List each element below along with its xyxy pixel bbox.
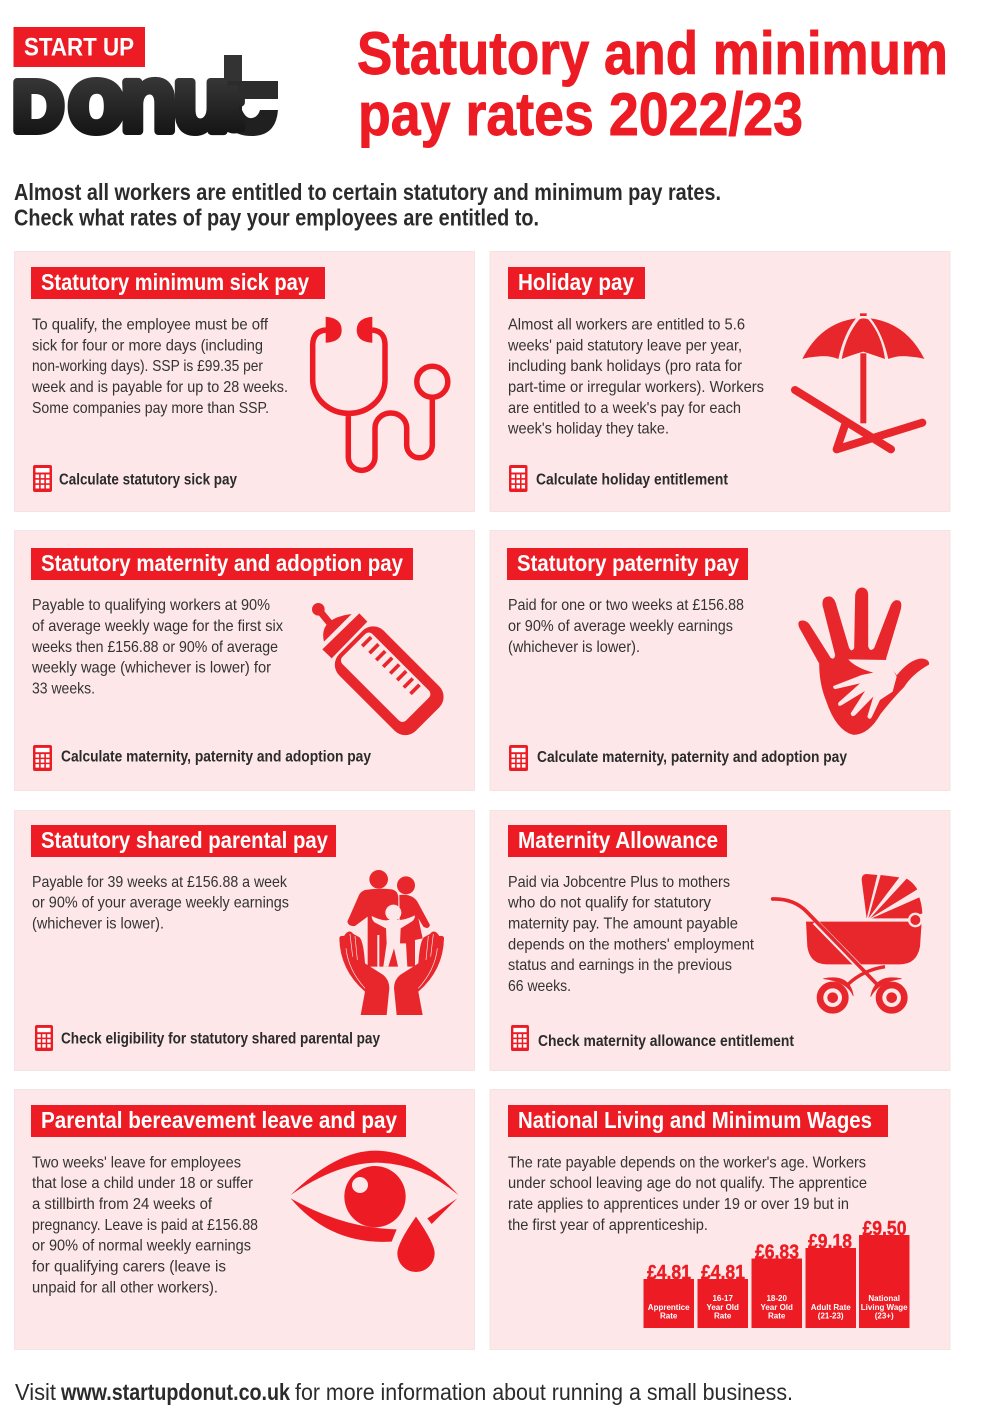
link: check maternity allowance entitlement: Check maternity allowance entitlement — [538, 1033, 794, 1050]
text block: shared parental pay: or 90% of your average weekly earnings — [32, 895, 289, 912]
icon: adult and child hands — [799, 588, 928, 734]
icon: baby bottle — [312, 603, 450, 741]
link: calculate holiday entitlement — [509, 465, 728, 492]
bar: apprentice rate: Apprentice — [648, 1303, 690, 1312]
heading: shared parental pay: Statutory shared parental pay — [41, 827, 328, 853]
logo: Start Up Donut: D — [12, 68, 64, 147]
bar: 16-17 year old rate: Year Old — [706, 1303, 739, 1312]
heading: national living and minimum wages: National Living and Minimum Wages — [518, 1107, 872, 1133]
text block: national wages: under school leaving age do not qualify. The apprentice — [508, 1175, 867, 1192]
bar: adult rate: Adult Rate — [811, 1303, 851, 1312]
bar: 16-17 year old rate — [698, 1262, 748, 1328]
text block: parental bereavement: unpaid for all other workers). — [32, 1279, 218, 1296]
bar: adult rate: (21-23) — [818, 1312, 844, 1320]
heading: maternity and adoption pay: Statutory maternity and adoption pay — [41, 550, 403, 576]
text block: maternity pay: weeks then £156.88 or 90% of average — [31, 639, 278, 656]
link: check eligibility for statutory shared parental pay: Check eligibility for statutory shared parental pay — [61, 1030, 380, 1048]
bar: national living wage: (23+) — [875, 1312, 894, 1320]
bar: 16-17 year old rate: Rate — [714, 1312, 732, 1320]
link: calculate maternity, paternity and adoption pay — [509, 745, 847, 771]
icon part: right hand — [394, 931, 444, 1015]
link: calculate maternity, paternity and adoption pay: Calculate maternity, paternity and adoption pay — [537, 749, 847, 766]
text block: holiday pay: Almost all workers are entitled to 5.6 — [508, 316, 745, 334]
panel: parental bereavement leave and pay — [14, 1090, 474, 1350]
text block: maternity allowance: status and earnings in the previous — [508, 957, 732, 974]
text block: shared parental pay: (whichever is lower). — [32, 916, 164, 932]
text block: sick pay: week and is payable for up to 28 weeks. — [31, 379, 288, 396]
panel: statutory maternity and adoption pay — [14, 530, 474, 790]
text block: parental bereavement: or 90% of normal weekly earnings — [32, 1238, 251, 1255]
text block: maternity allowance: Paid via Jobcentre Plus to mothers — [508, 874, 730, 891]
text block: national wages — [508, 1154, 867, 1234]
text block: parental bereavement — [32, 1154, 258, 1296]
panel: national living and minimum wages — [490, 1090, 950, 1350]
bar: 18-20 year old rate — [752, 1242, 802, 1328]
intro text — [14, 179, 721, 230]
text block: paternity pay: Paid for one or two weeks at £156.88 — [508, 597, 744, 614]
link: calculate maternity, paternity and adoption pay: Calculate maternity, paternity and adoption pay — [61, 748, 371, 766]
text block: sick pay: To qualify, the employee must be off — [32, 316, 269, 334]
panel: statutory minimum sick pay — [14, 252, 474, 512]
panel: statutory shared parental pay — [14, 810, 474, 1070]
logo: Start Up Donut: n — [120, 47, 177, 151]
link: check eligibility for statutory shared parental pay — [35, 1025, 380, 1051]
panel: holiday pay — [490, 252, 950, 512]
text block: sick pay — [31, 316, 288, 417]
heading: holiday pay: Holiday pay — [518, 269, 634, 295]
text block: sick pay: non-working days). SSP is £99.35 per — [32, 358, 264, 375]
text block: holiday pay: weeks' paid statutory leave per year, — [507, 337, 742, 354]
logo: Start Up Donut: START UP — [24, 34, 134, 62]
bar: 18-20 year old rate: Rate — [768, 1312, 786, 1320]
bar: national living wage: £9.50 — [862, 1218, 906, 1240]
text block: parental bereavement: Two weeks' leave for employees — [32, 1154, 241, 1171]
link: calculate maternity, paternity and adoption pay — [33, 745, 371, 771]
text block: national wages: rate applies to apprentices under 19 or over 19 but in — [508, 1196, 849, 1213]
bar: adult rate: £9.18 — [808, 1231, 852, 1253]
text block: parental bereavement: pregnancy. Leave is paid at £156.88 — [32, 1217, 258, 1234]
text block: maternity pay — [31, 597, 283, 698]
text block: parental bereavement: a stillbirth from 24 weeks of — [32, 1196, 213, 1213]
text block: paternity pay: or 90% of average weekly earnings — [508, 618, 733, 635]
bar: national living wage — [859, 1218, 910, 1328]
text block: parental bereavement: for qualifying carers (leave is — [32, 1258, 226, 1276]
text block: holiday pay: part-time or irregular workers). Workers — [508, 379, 764, 396]
heading: statutory paternity pay: Statutory paternity pay — [517, 550, 739, 576]
icon: stethoscope — [313, 317, 448, 470]
text block: national wages: The rate payable depends on the worker's age. Workers — [508, 1154, 866, 1171]
bar: national living wage: National — [868, 1294, 900, 1303]
logo: Start Up Donut: o — [68, 47, 125, 151]
heading: parental bereavement: Parental bereavement leave and pay — [41, 1107, 397, 1133]
heading: statutory minimum sick pay: Statutory minimum sick pay — [41, 269, 309, 295]
link: calculate holiday entitlement: Calculate holiday entitlement — [536, 472, 728, 488]
icon: eye with tear — [291, 1151, 458, 1272]
text block: sick pay: Some companies pay more than SSP. — [32, 400, 269, 417]
logo: Start Up Donut: u — [173, 47, 230, 151]
bar: adult rate — [806, 1231, 856, 1328]
link: check maternity allowance entitlement — [511, 1025, 794, 1051]
footer text: Visit — [15, 1379, 57, 1405]
title: pay rates 2022/23 — [358, 81, 803, 148]
text block: maternity pay: 33 weeks. — [32, 681, 95, 698]
bar: apprentice rate: £4.81 — [647, 1262, 691, 1284]
text block: shared parental pay: Payable for 39 weeks at £156.88 a week — [32, 874, 288, 891]
bar: 18-20 year old rate: 18-20 — [766, 1294, 787, 1303]
text block: paternity pay — [508, 597, 744, 656]
logo: Start Up Donut — [12, 27, 278, 151]
link: calculate statutory sick pay — [33, 465, 237, 492]
link: calculate statutory sick pay: Calculate statutory sick pay — [59, 472, 237, 488]
text block: maternity allowance: 66 weeks. — [508, 978, 571, 995]
panel: statutory paternity pay — [490, 530, 950, 790]
text block: maternity allowance: maternity pay. The amount payable — [508, 916, 738, 932]
title — [357, 20, 948, 148]
icon: family in hands — [339, 870, 444, 1015]
text block: maternity pay: of average weekly wage for the first six — [32, 618, 283, 635]
logo: Start Up Donut: t — [222, 75, 242, 142]
text block: maternity pay: weekly wage (whichever is lower) for — [31, 660, 272, 677]
text block: holiday pay — [507, 316, 764, 438]
intro text: Check what rates of pay your employees are entitled to. — [14, 204, 539, 230]
icon part: left hand — [339, 931, 389, 1015]
bar: national living wage: Living Wage — [861, 1303, 908, 1312]
text block: paternity pay: (whichever is lower). — [508, 639, 640, 656]
text block: holiday pay: including bank holidays (pro rata for — [508, 358, 743, 375]
panel: maternity allowance — [490, 810, 950, 1070]
footer text: www.startupdonut.co.uk — [60, 1379, 290, 1405]
icon: baby pram — [773, 874, 923, 1010]
text block: maternity allowance — [507, 874, 755, 995]
bar: 16-17 year old rate: 16-17 — [712, 1294, 733, 1303]
text block: national wages: the first year of apprenticeship. — [508, 1217, 708, 1234]
footer text: for more information about running a small business. — [295, 1379, 793, 1405]
intro text: Almost all workers are entitled to certain statutory and minimum pay rates. — [14, 179, 721, 205]
text block: sick pay: sick for four or more days (including — [32, 337, 263, 354]
text block: maternity allowance: depends on the mothers' employment — [508, 936, 755, 953]
text block: maternity allowance: who do not qualify for statutory — [507, 895, 711, 912]
bar: 16-17 year old rate: £4.81 — [701, 1262, 745, 1284]
bar: 18-20 year old rate: Year Old — [760, 1303, 793, 1312]
bar: apprentice rate — [644, 1262, 694, 1328]
bar: apprentice rate: Rate — [660, 1312, 678, 1320]
footer text — [15, 1379, 793, 1405]
text block: maternity pay: Payable to qualifying workers at 90% — [32, 597, 270, 614]
text block: holiday pay: week's holiday they take. — [507, 421, 669, 438]
text block: shared parental pay — [32, 874, 289, 932]
text block: parental bereavement: that lose a child under 18 or suffer — [32, 1175, 254, 1192]
bar chart: wage rates — [644, 1218, 910, 1328]
icon: beach umbrella and lounger — [795, 313, 924, 449]
text block: holiday pay: are entitled to a week's pay for each — [508, 400, 741, 417]
bar: 18-20 year old rate: £6.83 — [755, 1242, 799, 1264]
heading: maternity allowance: Maternity Allowance — [518, 827, 718, 853]
